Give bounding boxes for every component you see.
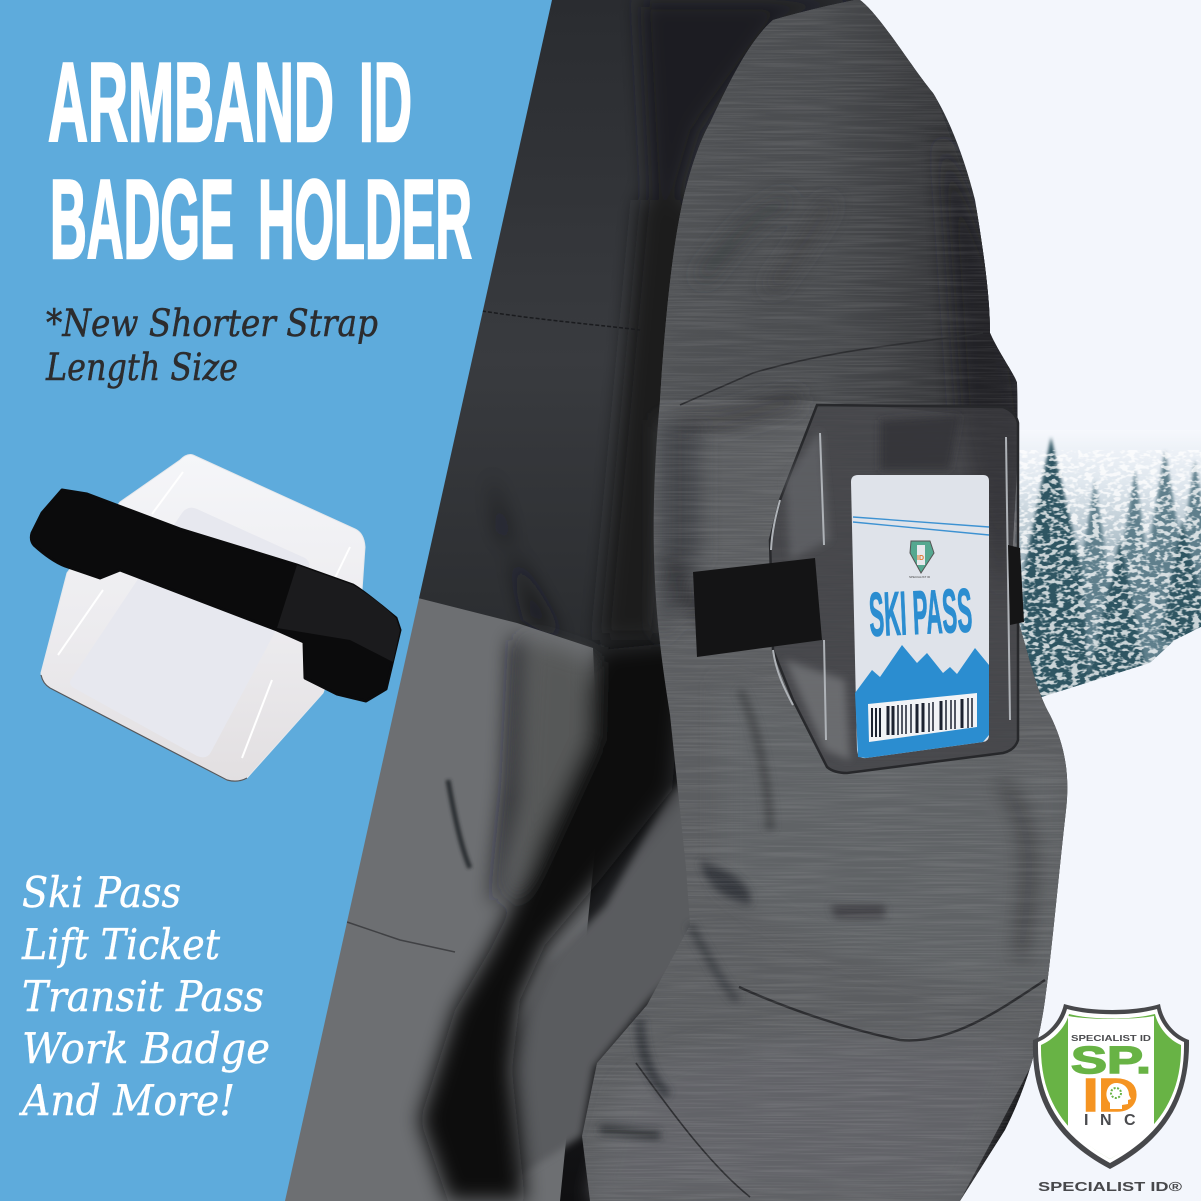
insert card <box>70 508 309 757</box>
mountains <box>855 645 989 758</box>
ski pass card <box>851 475 989 758</box>
worn armband holder with ski pass: SKI PASS <box>868 577 974 650</box>
subtitle <box>45 302 378 389</box>
mini logo: SPECIALIST ID <box>909 575 931 579</box>
holder slots <box>58 472 350 758</box>
id counter fill <box>1102 1081 1130 1107</box>
logo: specialist id shield: SP. <box>1071 1040 1151 1082</box>
mini logo: ID <box>917 555 924 562</box>
pouch light patches <box>785 415 960 760</box>
jacket photo <box>279 0 1080 1201</box>
clear vinyl holder <box>41 455 365 781</box>
use-case list: Work Badge <box>22 1024 270 1073</box>
strap right <box>1008 545 1024 625</box>
use-case list: Transit Pass <box>22 972 264 1021</box>
use-case list <box>18 868 270 1125</box>
head icon <box>1106 1083 1131 1109</box>
snowy forest scene <box>1015 430 1201 700</box>
product: armband badge holder <box>31 455 400 781</box>
central underside sleeve grey <box>514 784 690 1170</box>
title: ID <box>359 40 412 165</box>
fold seams on sleeve <box>636 333 1045 1197</box>
upper arm shading <box>660 0 1030 420</box>
logo: specialist id shield: ID <box>1083 1069 1138 1121</box>
snow ground <box>1000 627 1201 1201</box>
logo text: SPECIALIST ID <box>1071 1033 1151 1043</box>
worn armband holder with ski pass <box>693 405 1024 773</box>
use-case list: Ski Pass <box>22 868 181 917</box>
subtitle: Length Size <box>45 346 238 389</box>
barcode <box>868 693 977 742</box>
title <box>48 40 472 282</box>
logo: specialist id shield <box>1033 1004 1189 1194</box>
pouch slot highlights <box>771 433 1010 740</box>
jacket upper body: black <box>419 0 1068 1201</box>
shield outer <box>1033 1004 1189 1169</box>
strap sleeve <box>277 565 400 662</box>
jacket sleeve: heather grey arm <box>582 0 1075 1201</box>
blue panel <box>0 0 552 1201</box>
lift cable lines <box>853 517 989 535</box>
jacket lower body: grey <box>279 598 600 1201</box>
logo: specialist id shield: INC <box>1084 1112 1136 1129</box>
title: BADGE <box>50 157 234 282</box>
crease on lower body <box>448 780 470 868</box>
black shadow wedge between body and arm <box>420 640 700 1201</box>
black elastic strap <box>31 490 400 701</box>
use-case list: And More! <box>18 1076 235 1125</box>
brand wordmark: SPECIALIST ID® <box>1038 1180 1183 1194</box>
seam on lower body <box>347 922 455 952</box>
stitch line on black body <box>482 311 640 330</box>
subtitle: *New Shorter Strap <box>46 302 378 345</box>
title: ARMBAND <box>48 40 334 165</box>
head dots <box>1111 1088 1121 1098</box>
heather texture <box>575 0 1080 1201</box>
strap left <box>693 558 822 657</box>
clear vinyl pouch <box>770 405 1018 773</box>
shield white centre <box>1068 1016 1154 1159</box>
use-case list: Lift Ticket <box>21 920 220 969</box>
sleeve highlights and folds <box>590 130 1060 1201</box>
text: HOLDER <box>258 157 472 282</box>
mini logo <box>909 541 934 579</box>
